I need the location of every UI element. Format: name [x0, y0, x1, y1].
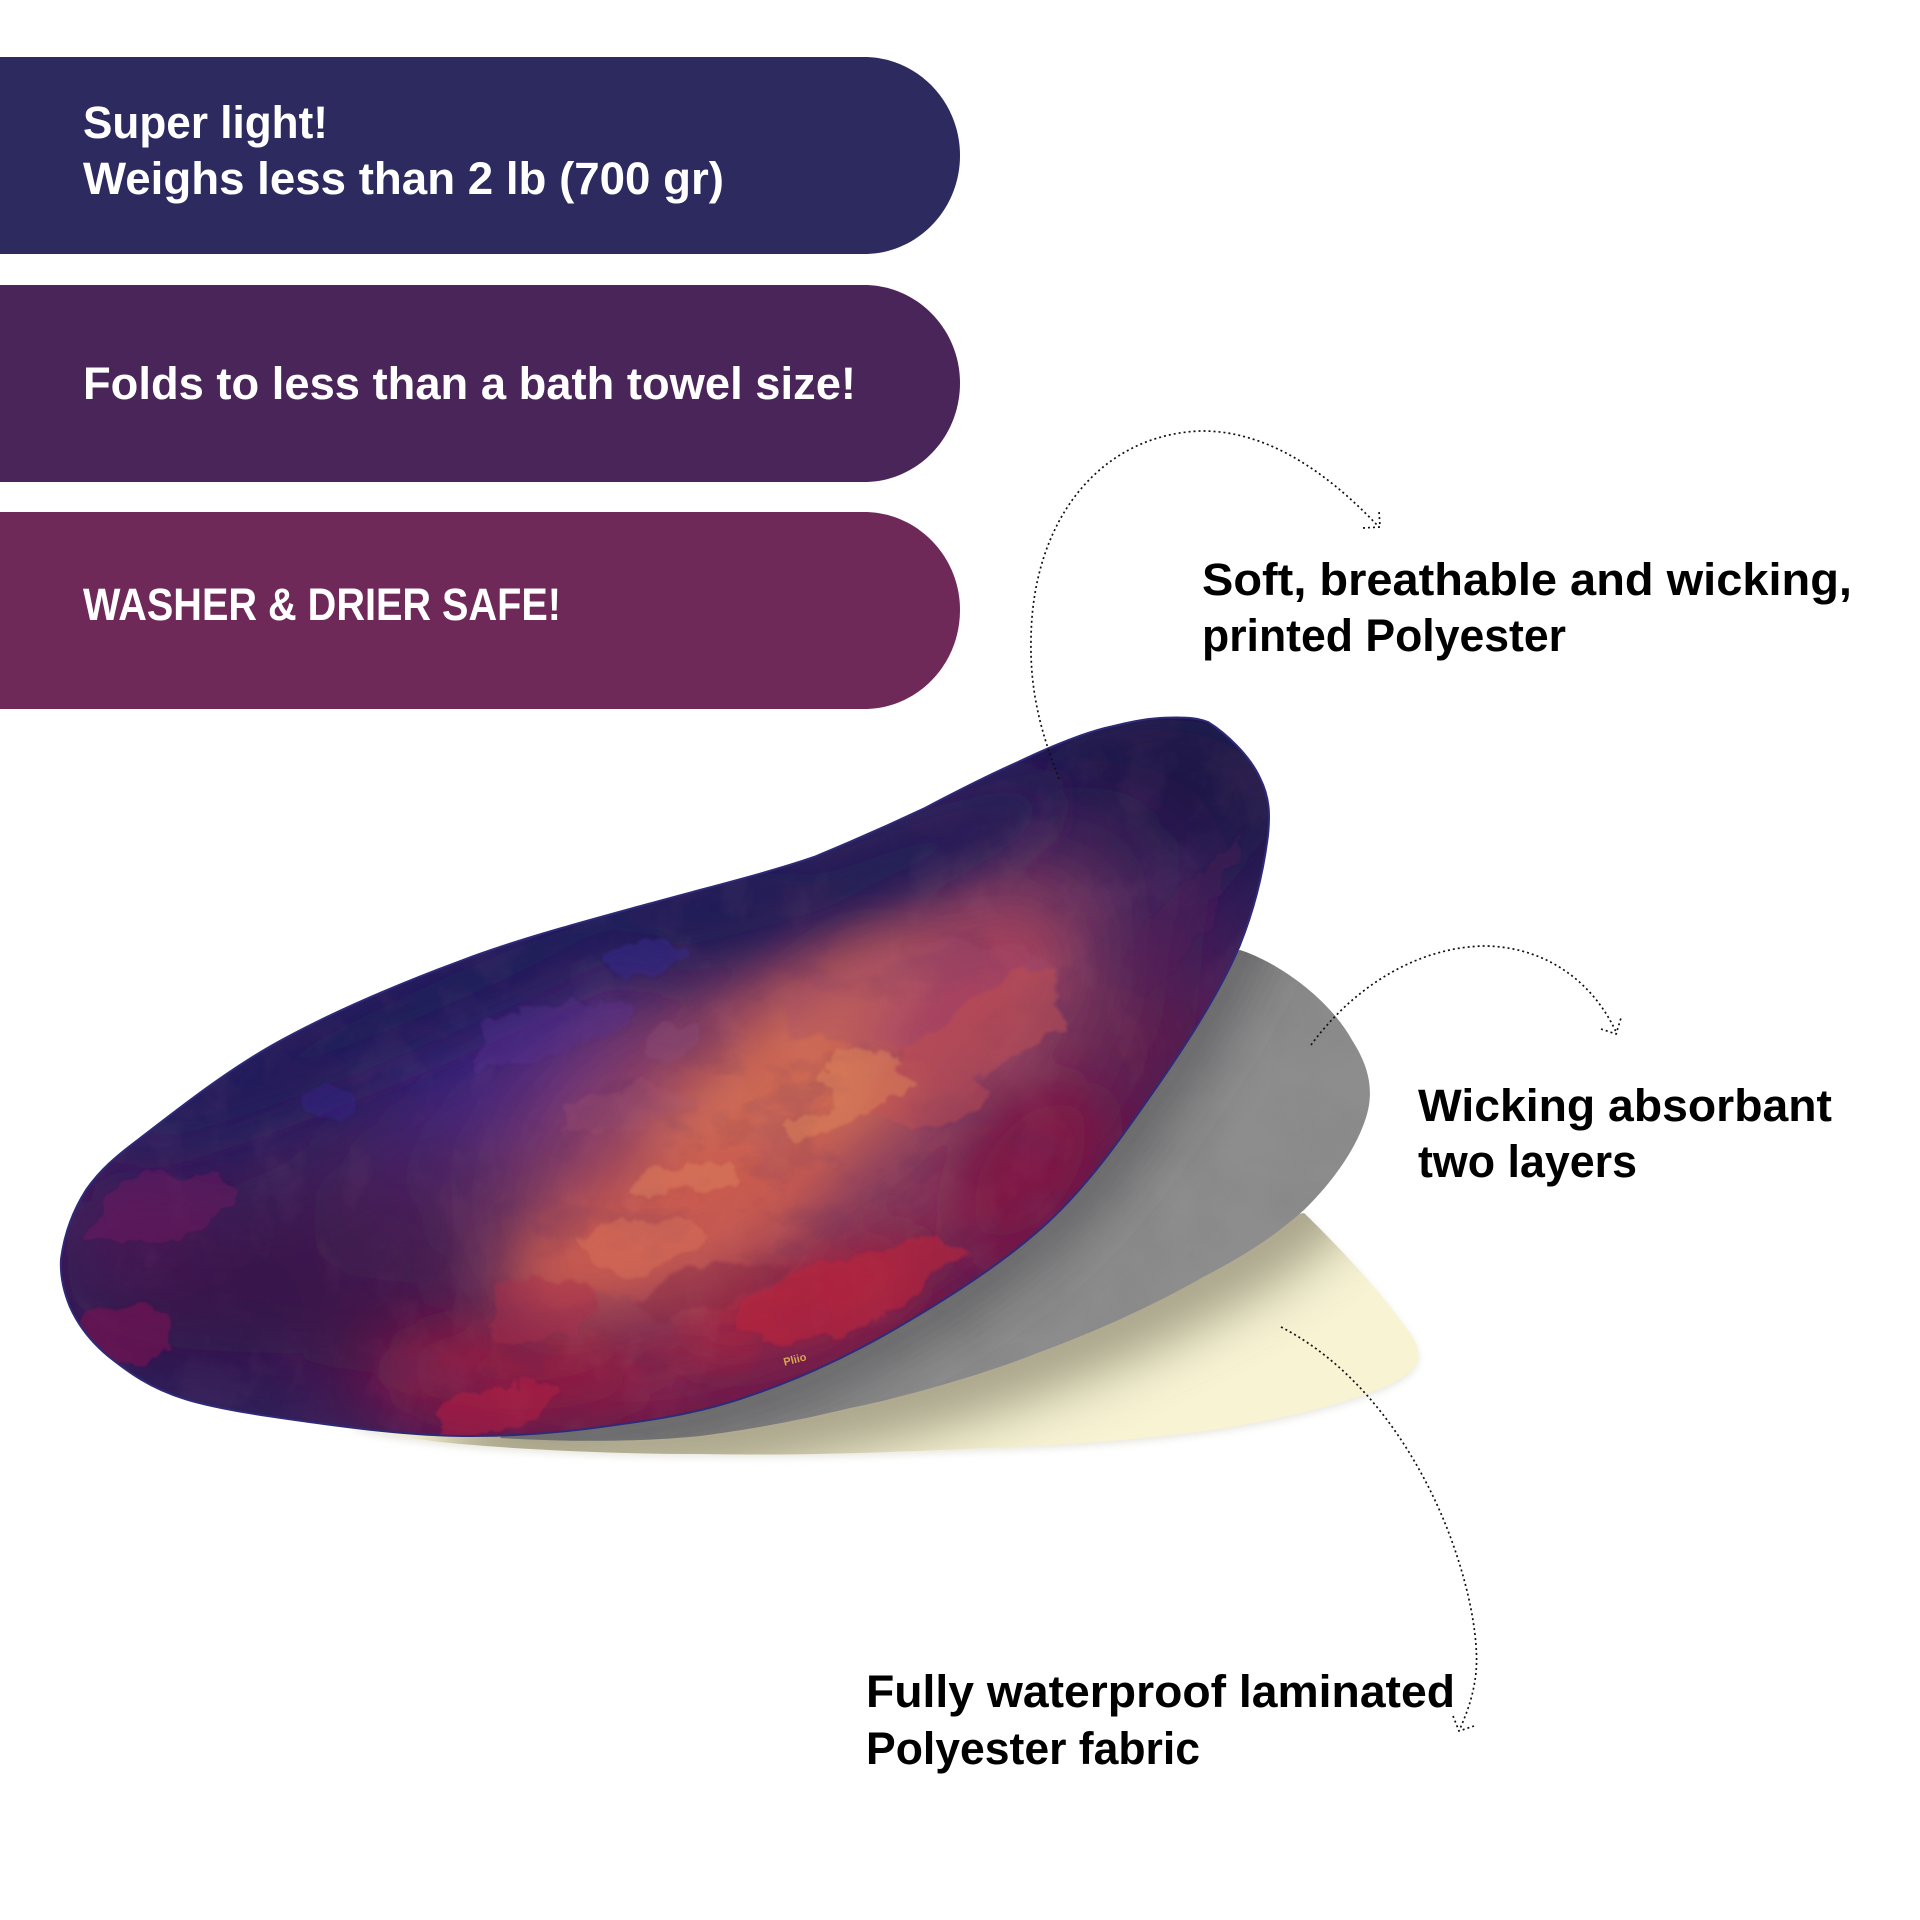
banner: super light: Weighs less than 2 lb (700 gr) [83, 153, 724, 204]
label: printed polyester: printed Polyester [1202, 610, 1566, 661]
label: waterproof fabric: Fully waterproof laminated [866, 1666, 1455, 1717]
banner: folds: Folds to less than a bath towel size! [83, 358, 856, 409]
logo on fabric: Pliio [782, 1351, 808, 1369]
layer: gray absorbent core [500, 950, 1370, 1441]
label: printed polyester: Soft, breathable and wicking, [1202, 554, 1852, 605]
banner: super light [0, 57, 960, 254]
label: wicking layers: Wicking absorbant [1418, 1080, 1832, 1131]
label: waterproof fabric [866, 1666, 1455, 1774]
label: wicking layers: two layers [1418, 1136, 1637, 1187]
arrow: top layer to polyester label [1031, 431, 1380, 779]
label: wicking layers [1418, 1080, 1832, 1187]
arrow: cream layer to waterproof label [1281, 1327, 1477, 1731]
banner: super light: Super light! [83, 97, 328, 148]
banner: washer and drier safe [0, 512, 960, 709]
label: waterproof fabric: Polyester fabric [866, 1723, 1200, 1774]
label: printed polyester [1202, 554, 1852, 661]
arrow: gray layer to wicking label [1311, 946, 1621, 1045]
banner: washer and drier safe: WASHER & DRIER SAFE! [83, 579, 561, 630]
layer: cream waterproof fabric [355, 1213, 1420, 1460]
layer: printed polyester top [60, 716, 1270, 1437]
banner: folds [0, 285, 960, 482]
